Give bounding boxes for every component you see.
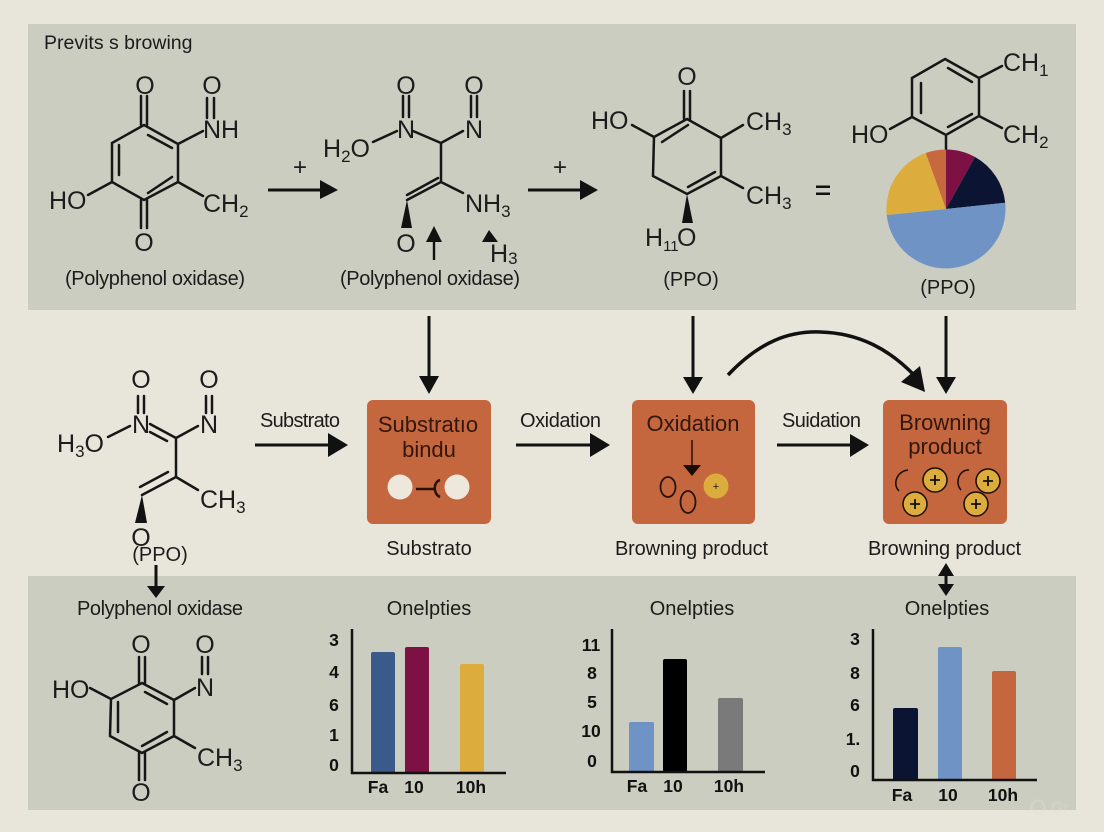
bar chart 2: 10 <box>663 776 683 796</box>
molecule 2: 3 <box>501 202 511 221</box>
bar chart 3: Fa <box>892 785 912 805</box>
bar chart 1: Fa <box>368 777 388 797</box>
molecule 5: (PPO) <box>132 544 188 566</box>
molecule 6: N <box>196 674 214 702</box>
bar chart 3: 0 <box>850 761 860 781</box>
arrow: step 1 with plus <box>268 154 338 199</box>
bar chart 2: 5 <box>587 692 597 712</box>
molecule 6: O <box>131 779 151 807</box>
molecule 3: O <box>677 224 696 252</box>
molecule 6 <box>52 631 243 807</box>
molecule 2: O <box>396 230 416 258</box>
bar chart 2: 11 <box>582 635 601 655</box>
molecule 2: N <box>397 116 415 144</box>
molecule 5: O <box>131 366 151 394</box>
molecule 2: H <box>490 240 508 268</box>
molecule 2: 3 <box>508 249 518 268</box>
molecule 5: O <box>131 524 151 552</box>
molecule 4 with pie chart: 1 <box>1039 61 1049 80</box>
bar chart 1: 6 <box>329 695 339 715</box>
arrow: molecule to bottom panel <box>147 565 165 598</box>
molecule 5: O <box>85 430 104 458</box>
bar chart 3: 3 <box>850 629 860 649</box>
caption: browning product: Browning product <box>868 538 1021 560</box>
bar chart 2: 8 <box>587 663 597 683</box>
panel: top reaction panel <box>28 24 1076 310</box>
box: oxidation <box>632 400 755 524</box>
molecule 3: O <box>677 63 697 91</box>
molecule 2: H <box>323 135 341 163</box>
molecule 3: 11 <box>663 238 679 255</box>
bar chart 2: Fa <box>627 776 647 796</box>
bar chart 1: 1 <box>329 725 339 745</box>
molecule 3: H <box>645 224 663 252</box>
molecule 3: CH <box>746 182 782 210</box>
arrow: substrato <box>255 410 348 457</box>
arrow: suidation: Suidation <box>782 410 861 432</box>
molecule 3: CH <box>746 108 782 136</box>
arrow: step 2 with plus <box>528 154 598 200</box>
bar chart 3: 6 <box>850 695 860 715</box>
molecule 4 with pie chart <box>851 49 1049 299</box>
arrow: oxidation: Oxidation <box>520 410 601 432</box>
molecule 1: HO <box>49 187 86 215</box>
molecule 4 with pie chart: 2 <box>1039 133 1049 152</box>
molecule 1: (Polyphenol oxidase) <box>65 268 245 290</box>
molecule 1 <box>49 72 249 290</box>
molecule 5: 3 <box>236 498 246 517</box>
bar chart 3: 10h <box>988 785 1018 805</box>
molecule 1: O <box>135 72 155 100</box>
molecule 5: N <box>132 411 150 439</box>
molecule 5: O <box>199 366 219 394</box>
bar chart 1: 10 <box>404 777 424 797</box>
heading: polyphenol oxidase: Polyphenol oxidase <box>77 598 243 620</box>
molecule 2: (Polyphenol oxidase) <box>340 268 520 290</box>
molecule 3 <box>591 63 792 291</box>
molecule 4 with pie chart: CH <box>1003 121 1039 149</box>
bar chart 1: 3 <box>329 630 339 650</box>
molecule 6: CH <box>197 744 233 772</box>
molecule 4 with pie chart: CH <box>1003 49 1039 77</box>
molecule 5: 3 <box>75 442 85 461</box>
box: substrate binding: Substratıo <box>378 412 478 437</box>
watermark <box>1032 800 1069 817</box>
molecule 6: O <box>195 631 215 659</box>
bar chart 2 <box>581 598 765 796</box>
box: browning product: Browning <box>899 410 991 435</box>
arrow: panel to substrate box <box>419 316 439 394</box>
molecule 1: 2 <box>239 202 249 221</box>
arrow: oxidation <box>516 410 610 457</box>
molecule 5: H <box>57 430 75 458</box>
equals sign <box>816 186 830 195</box>
bar chart 2: Onelpties <box>650 598 734 620</box>
molecule 2: 2 <box>341 147 351 166</box>
arrow: panel to browning box <box>936 316 956 394</box>
panel: bottom properties panel <box>28 576 1076 810</box>
bar chart 2: 10 <box>581 721 601 741</box>
molecule 2: N <box>465 116 483 144</box>
caption: browning product: Browning product <box>615 538 768 560</box>
molecule 6: 3 <box>233 756 243 775</box>
double arrow <box>938 563 954 596</box>
molecule 1: NH <box>203 116 239 144</box>
bar chart 3 <box>846 598 1037 805</box>
heading: Previts s browing <box>44 32 192 54</box>
box: browning product: product <box>908 434 982 459</box>
arrow: step 1 with plus: + <box>293 154 307 181</box>
bar chart 1: 10h <box>456 777 486 797</box>
box: oxidation: Oxidation <box>647 411 739 436</box>
molecule 3: (PPO) <box>663 269 719 291</box>
bar chart 1: 4 <box>329 662 339 682</box>
molecule 2: O <box>351 135 370 163</box>
bar chart 1: Onelpties <box>387 598 471 620</box>
molecule 6: O <box>131 631 151 659</box>
molecule 1: CH <box>203 190 239 218</box>
bar chart 3: 10 <box>938 785 958 805</box>
molecule 5 <box>57 366 246 566</box>
bar chart 2: 0 <box>587 751 597 771</box>
molecule 4 with pie chart: HO <box>851 121 888 149</box>
molecule 5: CH <box>200 486 236 514</box>
bar chart 3: Onelpties <box>905 598 989 620</box>
box: oxidation: + <box>713 481 719 493</box>
molecule 1: O <box>134 229 154 257</box>
arrow: substrato: Substrato <box>260 410 340 432</box>
bar chart 1 <box>329 598 506 797</box>
molecule 4 with pie chart: (PPO) <box>920 277 976 299</box>
caption: substrato: Substrato <box>386 538 472 560</box>
box: substrate binding <box>367 400 491 524</box>
molecule 2: NH <box>465 190 501 218</box>
bar chart 2: 10h <box>714 776 744 796</box>
molecule 5: N <box>200 411 218 439</box>
molecule 3: 3 <box>782 120 792 139</box>
molecule 2 <box>323 72 520 290</box>
arrow: panel to oxidation box <box>683 316 703 394</box>
arrow: suidation <box>777 410 869 457</box>
molecule 2: O <box>464 72 484 100</box>
box: browning product <box>883 400 1007 524</box>
pie chart <box>886 149 1006 268</box>
arrow: step 2 with plus: + <box>553 154 567 181</box>
bar chart 3: 8 <box>850 663 860 683</box>
bar chart 3: 1. <box>846 729 860 749</box>
molecule 2: O <box>396 72 416 100</box>
molecule 3: 3 <box>782 194 792 213</box>
molecule 6: HO <box>52 676 90 704</box>
molecule 3: HO <box>591 107 628 135</box>
box: substrate binding: bindu <box>402 437 456 462</box>
curved arrow: oxidation to browning <box>728 332 925 392</box>
watermark: Gr <box>1051 800 1069 817</box>
bar chart 1: 0 <box>329 755 339 775</box>
molecule 1: O <box>202 72 222 100</box>
